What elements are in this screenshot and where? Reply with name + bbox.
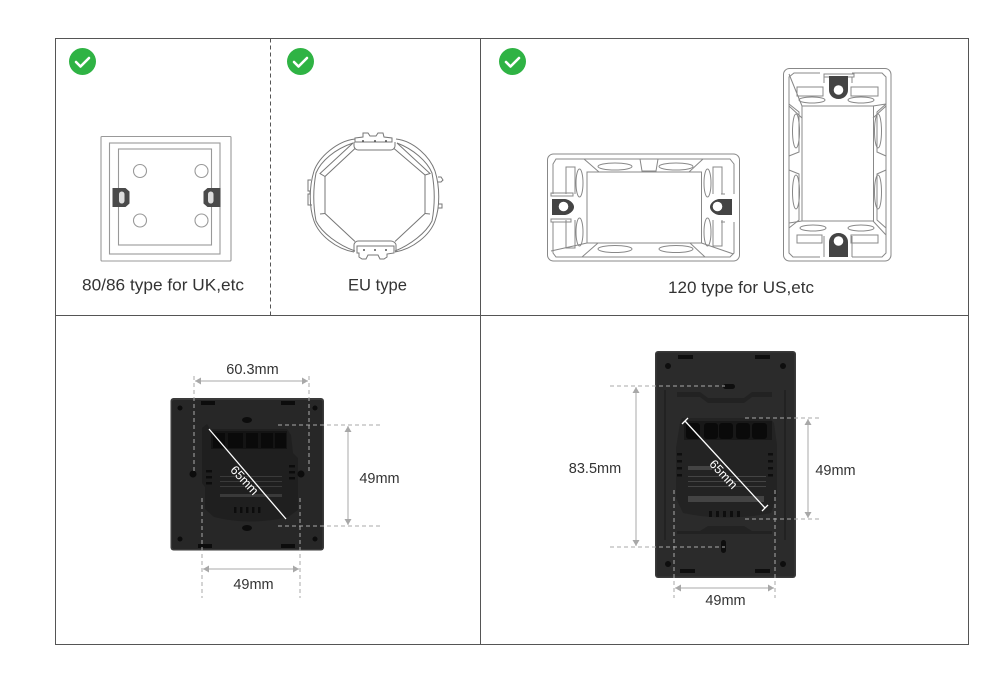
diagonal 65mm vertical: 65mm [706,457,740,492]
label: UK: 80/86 type for UK,etc [82,276,244,294]
diagonal 65mm vertical [682,418,768,511]
EU wall box [308,133,443,259]
icon: check UK [69,48,96,75]
US wall box vertical [784,68,891,261]
label: 83.5mm: 83.5mm [569,461,621,477]
icon: check US [499,48,526,75]
icon: check EU [287,48,314,75]
label: 49mm bottom vertical: 49mm [705,593,746,609]
module [202,424,298,522]
vertical switch back panel [655,351,796,578]
square switch dimensions [194,376,380,598]
label: 49mm bottom: 49mm [233,577,274,593]
UK wall box [101,136,231,261]
vertical switch dimensions [610,386,820,598]
square switch back panel [170,398,324,550]
label: 49mm right vertical: 49mm [815,463,856,479]
US wall box horizontal [548,154,740,261]
label: EU: EU type [348,276,407,294]
diagonal 65mm: 65mm [227,463,261,498]
diagonal 65mm [209,429,286,519]
label: 60.3mm: 60.3mm [226,362,279,378]
label: US: 120 type for US,etc [668,279,814,297]
module [676,418,777,518]
label: 49mm right: 49mm [359,471,400,487]
